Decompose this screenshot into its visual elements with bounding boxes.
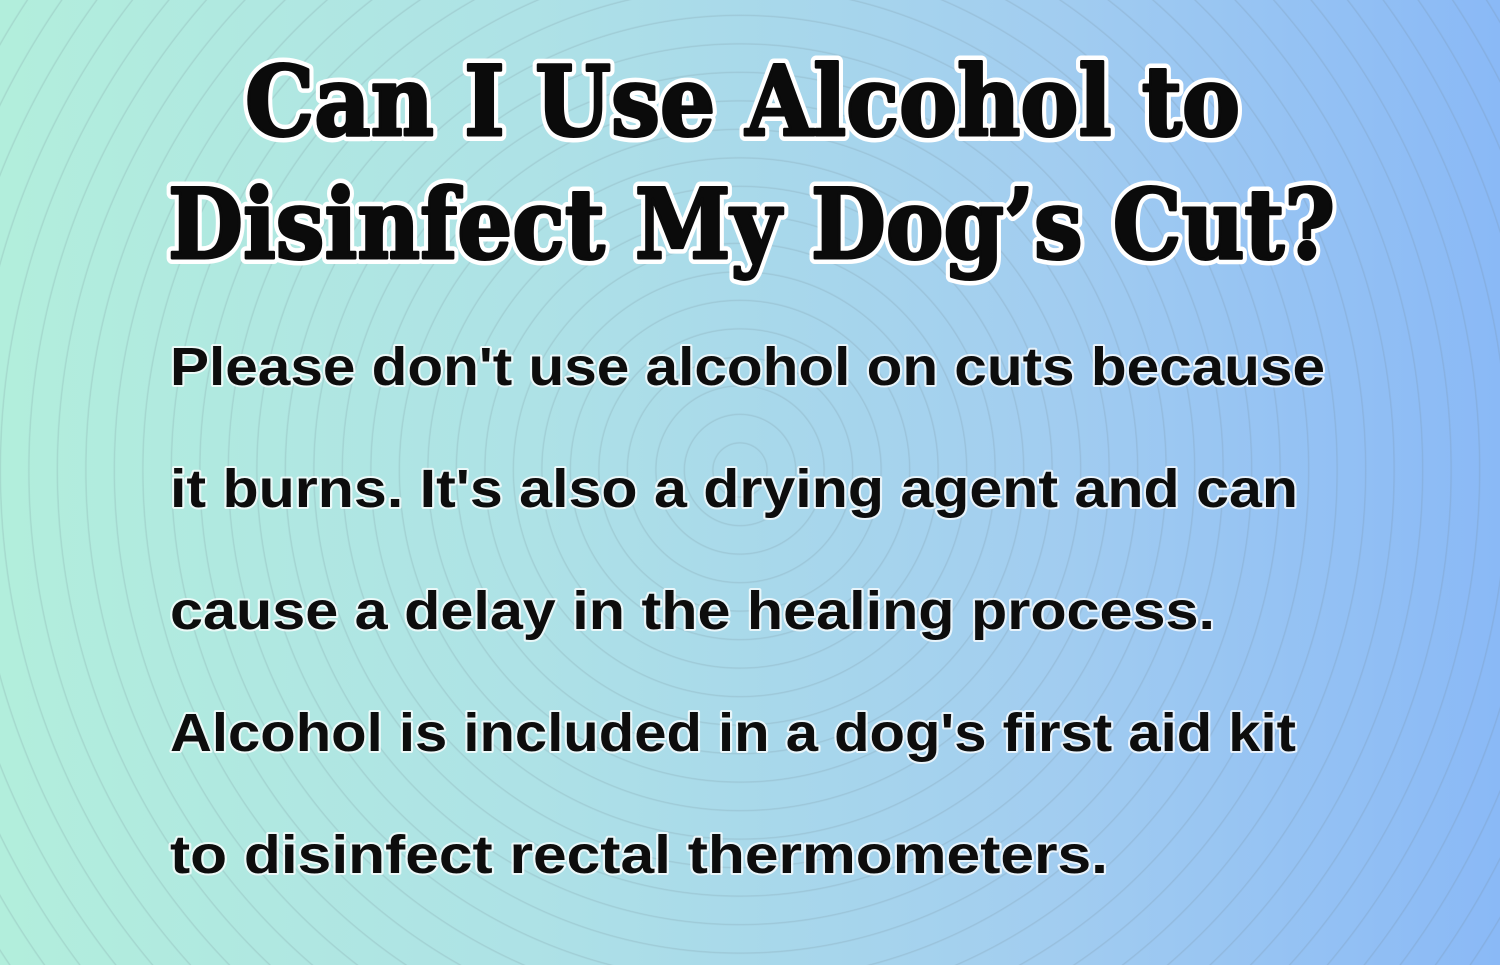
body text: Please don't use alcohol on cuts because — [170, 337, 1325, 397]
body text: it burns. It's also a drying agent and can — [170, 459, 1298, 519]
title: Disinfect My Dog’s Cut? — [168, 168, 1335, 281]
body text: cause a delay in the healing process. — [170, 581, 1215, 641]
title — [168, 45, 1335, 281]
title: Disinfect My Dog’s Cut? — [168, 168, 1335, 281]
body text — [170, 337, 1325, 885]
title: Can I Use Alcohol to — [245, 45, 1240, 158]
body text: to disinfect rectal thermometers. — [170, 825, 1108, 885]
body text: Alcohol is included in a dog's first aid kit — [170, 703, 1296, 763]
title: Can I Use Alcohol to — [245, 45, 1240, 158]
